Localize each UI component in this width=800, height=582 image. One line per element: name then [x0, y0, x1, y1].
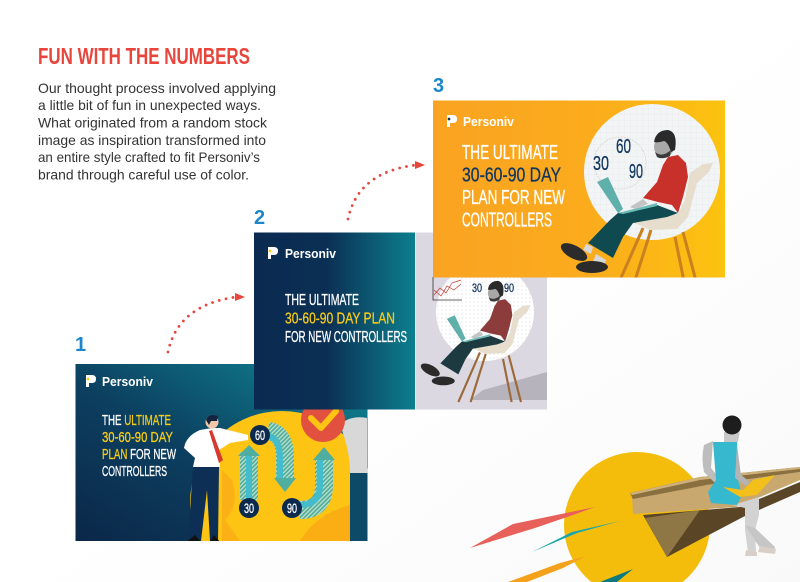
- number badge 30: 30: [244, 500, 254, 516]
- numbers 30 and 90: [472, 283, 514, 292]
- title: FUN WITH THE NUMBERS: [38, 43, 250, 69]
- number 2: 2: [254, 207, 265, 229]
- streak: red: [470, 507, 595, 548]
- panel: design 3: [433, 100, 725, 296]
- card 1 headline: CONTROLLERS: [102, 463, 167, 480]
- card 2 headline: THE ULTIMATE: [285, 292, 359, 309]
- arrow: step 1 to step 2: [168, 293, 245, 352]
- card 3 headline: 30-60-90 DAY: [462, 164, 561, 186]
- numbers 30 60 90: 90: [629, 161, 643, 183]
- card 1 headline: PLAN FOR NEW: [102, 446, 177, 463]
- number badge 90: 90: [287, 500, 297, 516]
- panel: design 1: [76, 364, 368, 541]
- line chart: [433, 277, 462, 300]
- number 1: 1: [75, 334, 86, 356]
- numbers 30 60 90: 60: [616, 136, 631, 158]
- intro text block: image as inspiration transformed into: [38, 133, 266, 148]
- card 2 headline: [285, 292, 407, 346]
- card 1 headline: [102, 412, 177, 480]
- paper plane: [630, 467, 800, 557]
- arrow: step 2 to step 3: [348, 161, 425, 219]
- intro text block: [38, 81, 276, 182]
- streak: teal: [532, 521, 620, 552]
- card 3 headline: THE ULTIMATE: [462, 141, 558, 164]
- numbers 30 60 90: 30: [593, 153, 609, 175]
- card 3 headline: CONTROLLERS: [462, 208, 552, 232]
- number badge 60: 60: [255, 427, 265, 443]
- intro text block: brand through careful use of color.: [38, 168, 249, 182]
- panel: design 2: [254, 232, 548, 410]
- card 3 logo: Personiv: [463, 114, 515, 129]
- card 3 headline: PLAN FOR NEW: [462, 186, 565, 209]
- card 3 headline: [462, 141, 565, 232]
- card 2 logo: Personiv: [285, 246, 337, 261]
- intro text block: Our thought process involved applying: [38, 81, 276, 96]
- arrows chart: [238, 431, 335, 510]
- intro text block: an entire style crafted to fit Personiv’s: [38, 150, 260, 165]
- card 1 logo: [86, 375, 153, 387]
- figure: man on chair: [419, 281, 530, 402]
- illustration: paper plane and woman: [470, 416, 800, 582]
- yellow sun circle: [564, 452, 710, 582]
- number badge 60: [250, 425, 270, 445]
- numbers 30 and 90: 90: [504, 281, 514, 295]
- woman with laptop: [702, 416, 776, 556]
- card 1 headline: THE ULTIMATE: [102, 412, 171, 429]
- number 3: 3: [433, 75, 444, 97]
- card 1 headline: 30-60-90 DAY: [102, 429, 173, 446]
- intro text block: a little bit of fun in unexpected ways.: [38, 98, 261, 113]
- numbers 30 60 90: [593, 138, 643, 178]
- card 3 logo: [447, 115, 514, 127]
- card 2 headline: 30-60-90 DAY PLAN: [285, 310, 395, 328]
- numbers 30 and 90: 30: [472, 281, 482, 295]
- intro text block: What originated from a random stock: [38, 116, 267, 130]
- streak: orange: [508, 556, 586, 582]
- streak: dark teal: [600, 569, 633, 582]
- number badge 90: [282, 498, 302, 518]
- card 1 logo: Personiv: [102, 374, 154, 389]
- card 2 logo: [268, 247, 336, 259]
- figure: businessman: [184, 415, 248, 543]
- card 2 headline: FOR NEW CONTROLLERS: [285, 329, 407, 346]
- figure: man on chair: [560, 130, 713, 278]
- number badge 30: [239, 498, 259, 518]
